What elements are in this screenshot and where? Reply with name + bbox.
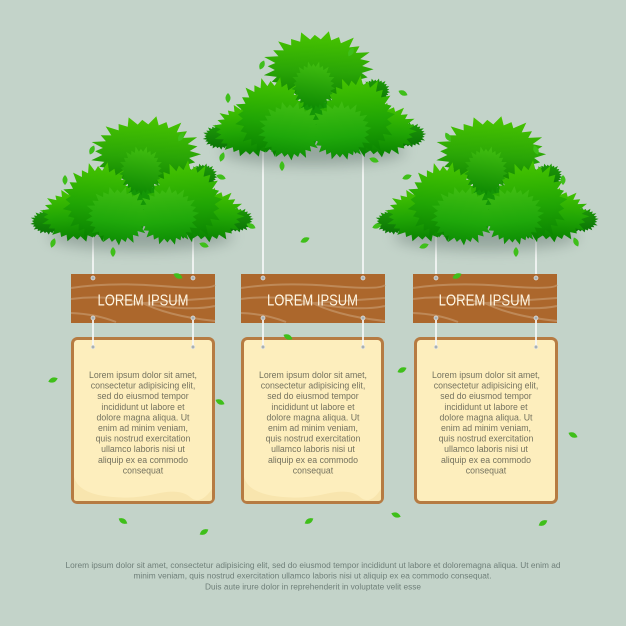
rivets on signs and notes: [91, 276, 538, 349]
falling leaves: [47, 46, 580, 537]
right note text: [432, 370, 540, 475]
left sign heading: LOREM IPSUM: [98, 292, 188, 310]
centre note text: [259, 370, 367, 475]
right note text: ullamco laboris nisi ut: [444, 444, 528, 454]
footer text: [66, 560, 561, 591]
left note text: aliquip ex ea commodo: [98, 455, 188, 465]
left note text: dolore magna aliqua. Ut: [97, 412, 190, 422]
right note text: consectetur adipisicing elit,: [434, 381, 538, 391]
centre note text: Lorem ipsum dolor sit amet,: [259, 370, 367, 380]
right note text: consequat: [466, 465, 507, 475]
centre note text: quis nostrud exercitation: [266, 434, 361, 444]
footer text: minim veniam, quis nostrud exercitation ullamco laboris nisi ut aliquip ex ea commodo consequat.: [134, 571, 492, 581]
left wooden sign: [71, 274, 215, 323]
right note text: sed do eiusmod tempor: [440, 391, 532, 401]
centre wooden sign: [241, 274, 385, 323]
left note text: incididunt ut labore et: [101, 402, 185, 412]
left note text: enim ad minim veniam,: [98, 423, 188, 433]
strings: top hangers from trees to signs: [93, 150, 536, 278]
centre note text: dolore magna aliqua. Ut: [267, 412, 360, 422]
left note text: [89, 370, 197, 475]
left note text: consequat: [123, 465, 164, 475]
tree: right bush: [374, 114, 600, 250]
centre note text: incididunt ut labore et: [271, 402, 355, 412]
centre note text: sed do eiusmod tempor: [267, 391, 359, 401]
footer text: Duis aute irure dolor in reprehenderit in voluptate velit esse: [205, 581, 421, 591]
centre paper note: [242, 338, 382, 502]
tree: centre bush: [201, 29, 427, 165]
right note text: Lorem ipsum dolor sit amet,: [432, 370, 540, 380]
strings: lower hangers from signs to notes: [93, 318, 536, 347]
tree: left bush: [29, 114, 255, 250]
centre note text: enim ad minim veniam,: [268, 423, 358, 433]
centre note text: aliquip ex ea commodo: [268, 455, 358, 465]
footer text: Lorem ipsum dolor sit amet, consectetur adipisicing elit, sed do eiusmod tempor incididunt ut labore et doloremagna aliqua. Ut enim ad: [66, 560, 561, 570]
right note text: aliquip ex ea commodo: [441, 455, 531, 465]
left note text: sed do eiusmod tempor: [97, 391, 189, 401]
right note text: dolore magna aliqua. Ut: [440, 412, 533, 422]
centre sign heading: LOREM IPSUM: [267, 292, 358, 310]
right sign heading: LOREM IPSUM: [439, 292, 531, 310]
left note text: Lorem ipsum dolor sit amet,: [89, 370, 197, 380]
panel: right sign and note: [413, 274, 557, 502]
centre note text: consectetur adipisicing elit,: [261, 381, 365, 391]
right note text: enim ad minim veniam,: [441, 423, 531, 433]
right note text: quis nostrud exercitation: [439, 434, 534, 444]
right wooden sign: [413, 274, 557, 323]
left paper note: [72, 338, 214, 502]
left note text: consectetur adipisicing elit,: [91, 381, 195, 391]
left note text: quis nostrud exercitation: [96, 434, 191, 444]
right paper note: [416, 338, 556, 502]
right note text: incididunt ut labore et: [444, 402, 528, 412]
left note text: ullamco laboris nisi ut: [101, 444, 185, 454]
panel: left sign and note: [71, 274, 215, 502]
centre note text: consequat: [293, 465, 334, 475]
centre note text: ullamco laboris nisi ut: [271, 444, 355, 454]
panel: centre sign and note: [241, 274, 385, 502]
